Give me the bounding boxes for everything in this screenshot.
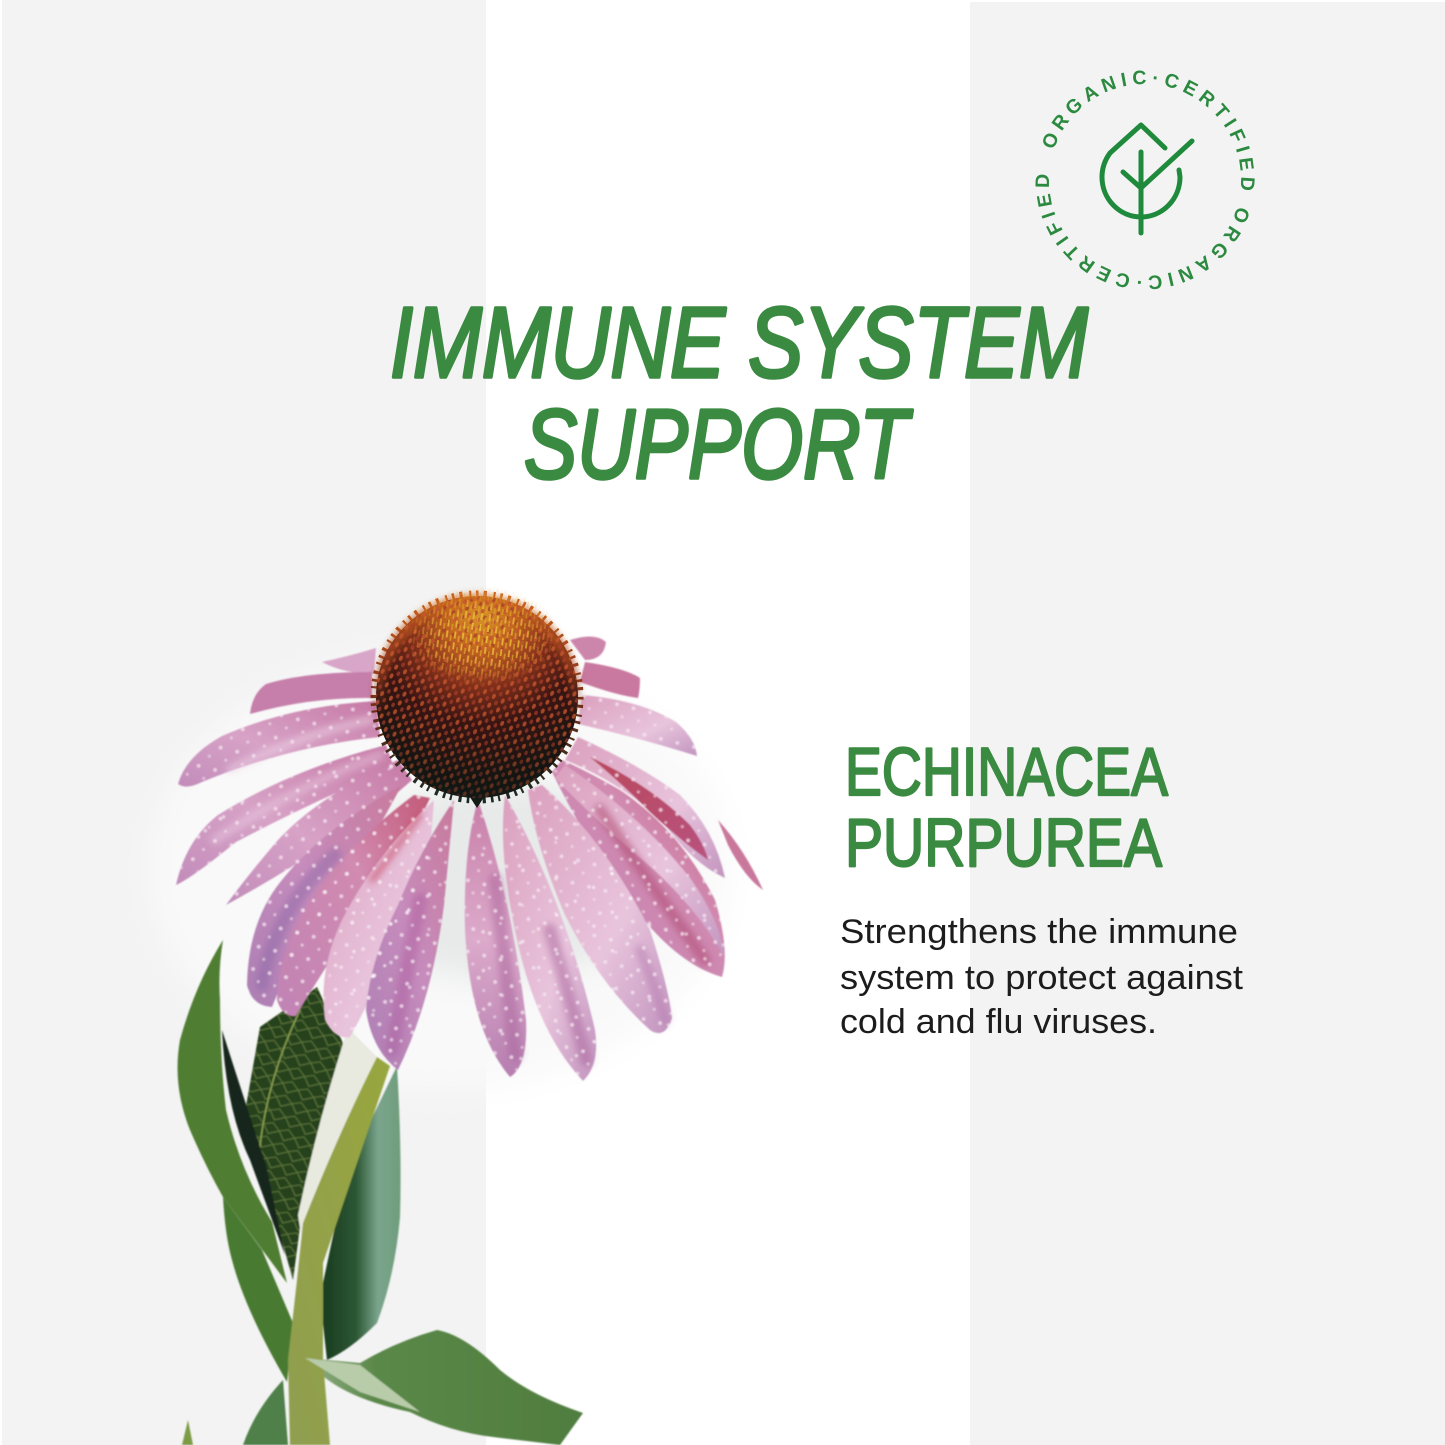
leaf: right grey-green — [320, 1066, 401, 1360]
flower petals — [176, 636, 763, 1081]
leaf: lower left — [223, 1197, 293, 1382]
icon: leaf with check — [1102, 125, 1192, 233]
heading: echinacea purpurea — [845, 734, 1169, 881]
description text: system to protect against — [840, 959, 1244, 997]
panel: left band — [2, 0, 486, 1445]
leaf: front narrow — [178, 940, 287, 1283]
illustration: echinacea plant — [176, 586, 763, 1445]
description text: Strengthens the immune — [840, 913, 1238, 951]
title line 2: SUPPORT — [524, 389, 913, 499]
description text — [840, 913, 1244, 1041]
stalk white — [298, 1028, 377, 1262]
panel: right band — [970, 2, 1445, 1445]
flower cone — [376, 586, 578, 808]
stalk green — [288, 1057, 390, 1445]
petal shading streaks — [215, 720, 705, 1060]
title line 1: IMMUNE SYSTEM — [390, 287, 1089, 399]
leaf: dark fold — [222, 1030, 285, 1255]
leaf: tiny tip — [182, 1420, 193, 1445]
leaves and stem — [178, 940, 583, 1445]
halo around flower — [150, 650, 730, 1090]
petals front — [277, 785, 672, 1081]
water droplets — [176, 695, 725, 1081]
title — [390, 287, 1089, 499]
leaf: bottom small — [243, 1380, 288, 1445]
description text: cold and flu viruses. — [840, 1003, 1157, 1041]
petals back — [176, 636, 763, 1007]
badge ring text: ORGANIC·CERTIFIED ORGANIC·CERTIFIED — [1036, 70, 1255, 290]
leaf: back veined — [243, 987, 343, 1280]
leaf: bottom right — [307, 1330, 583, 1445]
heading line 1: ECHINACEA — [845, 734, 1169, 810]
badge: certified organic — [1036, 70, 1255, 290]
heading line 2: PURPUREA — [845, 805, 1163, 881]
